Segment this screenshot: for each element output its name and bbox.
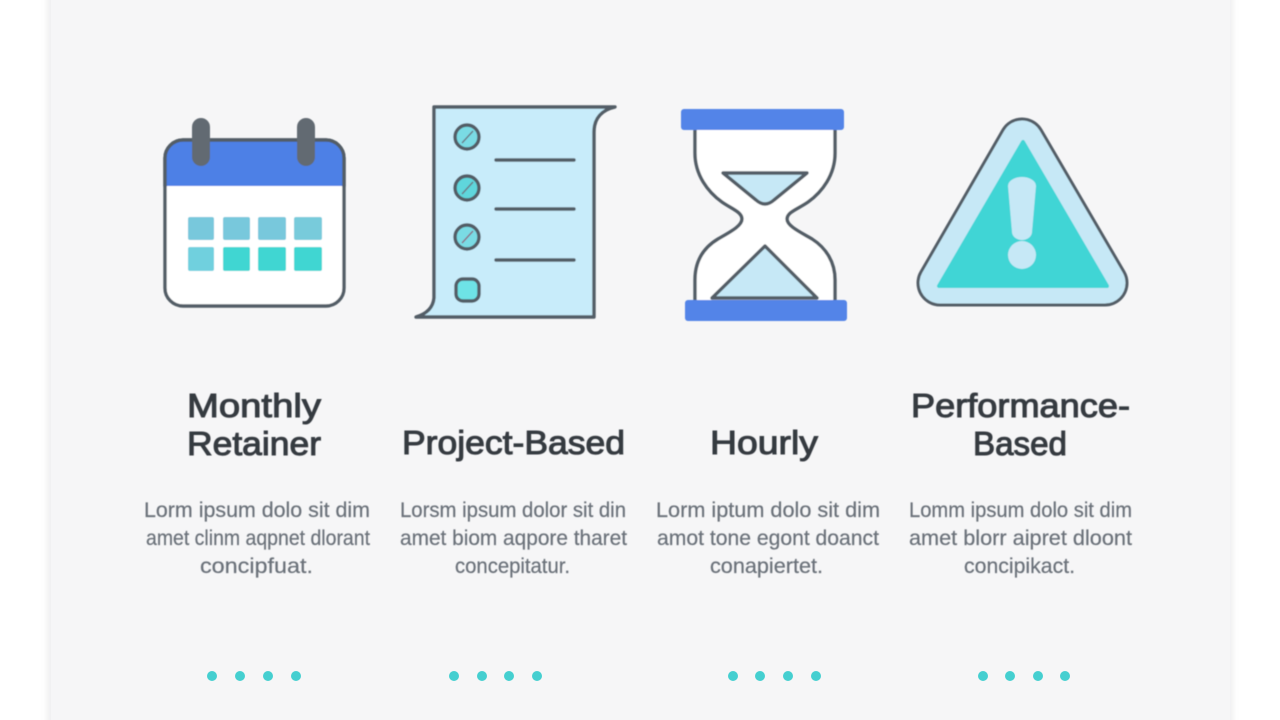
heading: Performance-Based: Based (973, 425, 1067, 462)
icon: warning triangle (939, 141, 1107, 286)
heading: Monthly Retainer (187, 387, 322, 462)
column: Performance-Based (909, 141, 1132, 681)
text block: description (400, 499, 627, 578)
column: Project-Based (400, 107, 627, 681)
icon: checklist document (416, 107, 615, 317)
text block: description: concepitatur. (455, 555, 570, 578)
text block: description: concipikact. (964, 555, 1075, 578)
check item 4 (456, 279, 479, 301)
check item 2 (455, 176, 479, 200)
text block: description: Lorm iptum dolo sit dim (656, 499, 880, 522)
text block: description: Lorm ipsum dolo sit dim (144, 499, 370, 522)
text block: description: conapiertet. (710, 555, 823, 578)
heading: Project-Based: Project-Based (402, 424, 625, 461)
text block: description (909, 499, 1132, 578)
text block: description: amet clinm aqpnet dlorant (146, 527, 370, 550)
column: Hourly (656, 109, 880, 681)
column: Monthly Retainer (144, 118, 370, 681)
icon: calendar (165, 118, 344, 306)
text block: description (144, 499, 370, 578)
text block: description: amet blorr aipret dloont (909, 527, 1132, 550)
dots (728, 671, 821, 681)
heading: Monthly Retainer: Retainer (187, 425, 321, 462)
text block: description: amet biom aqpore tharet (400, 527, 627, 550)
check item 1 (455, 125, 479, 149)
text block: description: amot tone egont doanct (657, 527, 879, 550)
dots (978, 671, 1070, 681)
dots (207, 671, 301, 681)
check item 3 (455, 225, 479, 249)
dots (449, 671, 542, 681)
heading: Monthly Retainer: Monthly (187, 387, 322, 424)
text block: description: Lorsm ipsum dolor sit din (400, 499, 626, 522)
text block: description: Lomm ipsum dolo sit dim (909, 499, 1132, 522)
heading: Hourly: Hourly (710, 424, 819, 461)
heading: Performance-Based (911, 387, 1130, 462)
heading: Performance-Based: Performance- (911, 387, 1130, 424)
icon: hourglass (681, 109, 847, 321)
text block: description: concipfuat. (200, 555, 313, 578)
text block: description (656, 499, 880, 578)
